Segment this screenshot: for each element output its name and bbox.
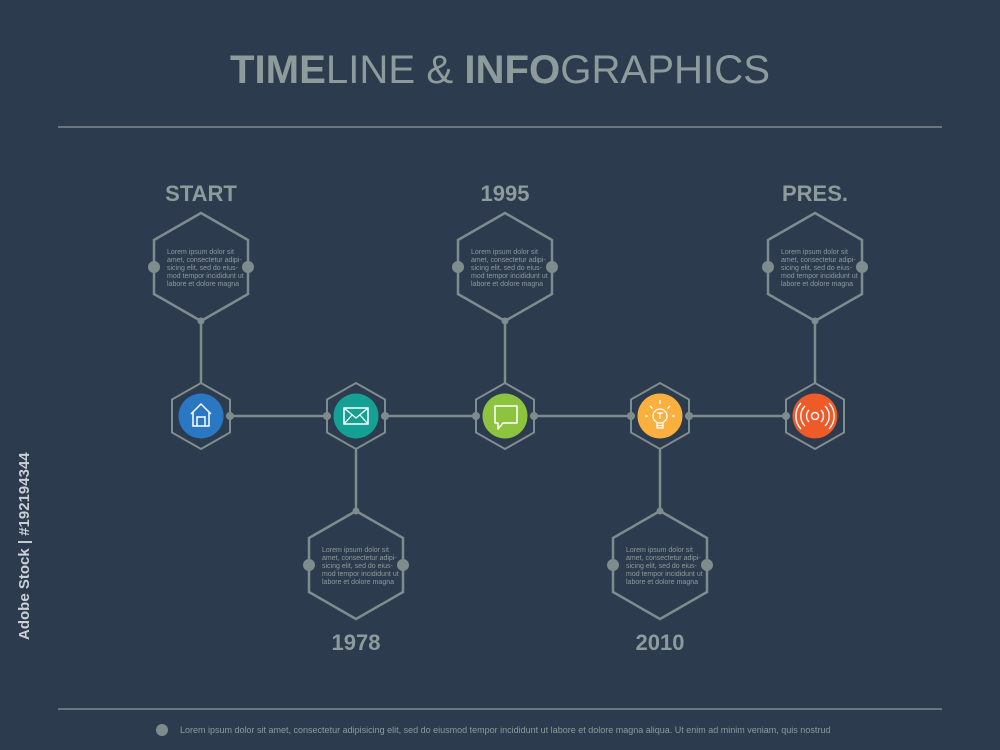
node: 1978: Lorem ipsum dolor sit bbox=[322, 547, 389, 554]
icon: home bbox=[172, 383, 234, 449]
node: 1995: Lorem ipsum dolor sit bbox=[471, 249, 538, 256]
node: 1978: labore et dolore magna bbox=[322, 579, 394, 586]
node: 1995: mod tempor incididunt ut bbox=[471, 273, 548, 280]
icon: chat bbox=[472, 383, 538, 449]
node: pres: sicing elit, sed do eius- bbox=[781, 265, 852, 272]
node: pres bbox=[762, 181, 868, 324]
icon: signal bbox=[782, 383, 844, 449]
node: 2010 bbox=[607, 508, 713, 655]
node: 2010: Lorem ipsum dolor sit bbox=[626, 547, 693, 554]
node: 1995: amet, consectetur adipi- bbox=[471, 257, 546, 264]
node: start bbox=[148, 181, 254, 324]
title: TIMELINE & INFOGRAPHICS bbox=[230, 48, 770, 92]
node: 1978 bbox=[303, 508, 409, 655]
node: 1978: amet, consectetur adipi- bbox=[322, 555, 397, 562]
node: 1995: sicing elit, sed do eius- bbox=[471, 265, 542, 272]
footer note: Lorem ipsum dolor sit amet, consectetur adipisicing elit, sed do eiusmod tempor incididunt ut labore et dolore magna aliqua. Ut enim ad minim veniam, quis nostrud bbox=[180, 725, 830, 735]
node: 2010: amet, consectetur adipi- bbox=[626, 555, 701, 562]
node: 1995: 1995 bbox=[481, 181, 529, 206]
node: pres: labore et dolore magna bbox=[781, 281, 853, 288]
node: start: amet, consectetur adipi- bbox=[167, 257, 242, 264]
watermark id: Adobe Stock | #192194344 bbox=[16, 452, 33, 640]
node: start: Lorem ipsum dolor sit bbox=[167, 249, 234, 256]
node: 1995 bbox=[452, 181, 558, 324]
node: 1995: labore et dolore magna bbox=[471, 281, 543, 288]
icon: mail bbox=[323, 383, 389, 449]
node: start: START bbox=[165, 181, 237, 206]
node: start: sicing elit, sed do eius- bbox=[167, 265, 238, 272]
node: start: labore et dolore magna bbox=[167, 281, 239, 288]
node: start: mod tempor incididunt ut bbox=[167, 273, 244, 280]
node: pres: Lorem ipsum dolor sit bbox=[781, 249, 848, 256]
node: 1978: 1978 bbox=[332, 630, 380, 655]
node: pres: mod tempor incididunt ut bbox=[781, 273, 858, 280]
node: 2010: 2010 bbox=[636, 630, 684, 655]
node: 1978: mod tempor incididunt ut bbox=[322, 571, 399, 578]
node: pres: PRES. bbox=[782, 181, 848, 206]
node: 2010: sicing elit, sed do eius- bbox=[626, 563, 697, 570]
node: 1978: sicing elit, sed do eius- bbox=[322, 563, 393, 570]
node: 2010: labore et dolore magna bbox=[626, 579, 698, 586]
icon: bulb bbox=[627, 383, 693, 449]
timeline connectors bbox=[201, 321, 815, 511]
node: pres: amet, consectetur adipi- bbox=[781, 257, 856, 264]
node: 2010: mod tempor incididunt ut bbox=[626, 571, 703, 578]
